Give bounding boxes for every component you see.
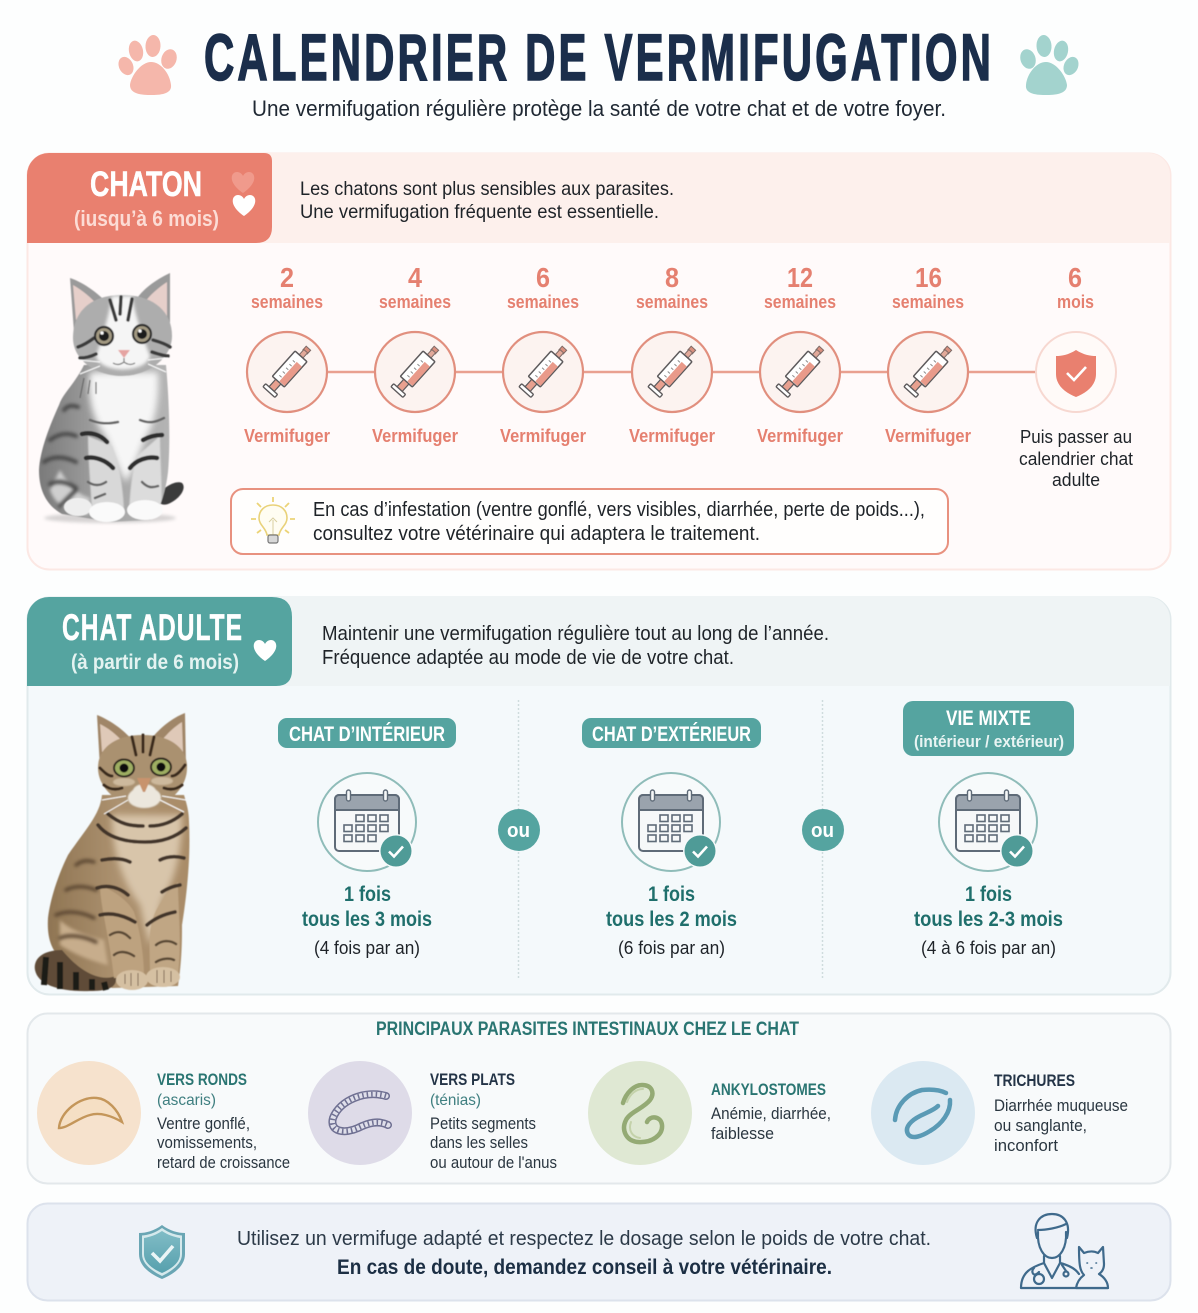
parasite: vers plats: dans les selles (430, 1134, 528, 1152)
chaton tab: CHATON (90, 165, 202, 204)
chat adulte tab (27, 597, 292, 686)
timeline step: 6 semaines: Vermifuger (500, 426, 586, 446)
callout: infestation (231, 489, 948, 554)
panel: parasites (28, 1014, 1170, 1184)
timeline step: 12 semaines: semaines (764, 292, 836, 312)
chaton tab (27, 153, 272, 243)
conseil text: Utilisez un vermifuge adapté et respectez le dosage selon le poids de votre chat. (237, 1227, 931, 1250)
timeline step: 6 semaines (500, 262, 586, 446)
chat adulte description: Maintenir une vermifugation régulière tout au long de l’année. (322, 623, 829, 645)
parasite: vers plats (308, 1061, 557, 1172)
parasite: trichures: Diarrhée muqueuse (994, 1097, 1128, 1115)
column: chat d'intérieur: tous les 3 mois (302, 908, 432, 931)
timeline step: 12 semaines (757, 262, 843, 446)
column: chat d'extérieur: CHAT D’EXTÉRIEUR (592, 723, 751, 746)
panel: chat adulte (27, 597, 1170, 994)
chaton tab: (iusqu’à 6 mois) (74, 206, 219, 231)
icon: pink paw (116, 35, 179, 95)
timeline step: 2 semaines: 2 (280, 262, 294, 293)
timeline step: 6 mois (1019, 262, 1133, 490)
"ou" badge 1 (498, 809, 540, 851)
chaton description: Les chatons sont plus sensibles aux parasites. (300, 178, 674, 200)
column: vie mixte: tous les 2-3 mois (914, 908, 1063, 931)
header (116, 20, 1081, 121)
timeline step: 6 mois: mois (1057, 292, 1094, 312)
parasite: trichures: TRICHURES (994, 1071, 1075, 1090)
column: chat d'intérieur (278, 718, 456, 958)
column: chat d'extérieur (582, 718, 761, 958)
parasite: trichures (871, 1061, 1128, 1165)
timeline step: 16 semaines: 16 (915, 262, 942, 293)
timeline step: 8 semaines: semaines (636, 292, 708, 312)
timeline step: 6 mois: adulte (1052, 470, 1100, 490)
timeline step: 2 semaines: Vermifuger (244, 426, 330, 446)
timeline step: 16 semaines (885, 262, 971, 446)
timeline step: 16 semaines: Vermifuger (885, 426, 971, 446)
column: chat d'intérieur: CHAT D’INTÉRIEUR (289, 723, 445, 746)
chat adulte tab: (à partir de 6 mois) (71, 651, 239, 674)
column: vie mixte: (4 à 6 fois par an) (921, 937, 1056, 958)
column: chat d'extérieur: 1 fois (648, 883, 695, 906)
timeline step: 4 semaines (372, 262, 458, 446)
parasite: trichures: inconfort (994, 1137, 1058, 1155)
conseil text (237, 1227, 931, 1279)
column: vie mixte: VIE MIXTE (946, 707, 1031, 730)
parasite: vers ronds: retard de croissance (157, 1154, 290, 1172)
timeline step: 12 semaines: Vermifuger (757, 426, 843, 446)
parasite: vers ronds: VERS RONDS (157, 1070, 247, 1089)
timeline step: 8 semaines (629, 262, 715, 446)
chat adulte description: Fréquence adaptée au mode de vie de votre chat. (322, 647, 734, 669)
illustration: adult tabby cat (35, 713, 189, 991)
parasite: vers ronds: vomissements, (157, 1134, 257, 1152)
conseil text: En cas de doute, demandez conseil à votre vétérinaire. (337, 1256, 832, 1279)
timeline step: 8 semaines: Vermifuger (629, 426, 715, 446)
icon: vet with cat (1021, 1214, 1108, 1288)
timeline step: 16 semaines: semaines (892, 292, 964, 312)
parasite: vers plats: (ténias) (430, 1092, 481, 1109)
chaton description: Une vermifugation fréquente est essentielle. (300, 201, 659, 223)
panel: conseil (28, 1204, 1170, 1300)
icon: teal paw (1018, 35, 1081, 95)
column: vie mixte: (intérieur / extérieur) (914, 732, 1064, 751)
parasite: ankylostomes: faiblesse (711, 1125, 774, 1143)
parasite: vers plats: Petits segments (430, 1115, 536, 1133)
timeline step: 12 semaines: 12 (787, 262, 813, 293)
timeline step: 6 semaines: semaines (507, 292, 579, 312)
parasite: vers plats: VERS PLATS (430, 1070, 515, 1089)
parasite: vers ronds: (ascaris) (157, 1092, 216, 1109)
illustration: kitten (39, 273, 184, 523)
timeline step: 4 semaines: 4 (408, 262, 422, 293)
parasite: ankylostomes (588, 1061, 831, 1165)
timeline step: 4 semaines: semaines (379, 292, 451, 312)
timeline step: 8 semaines: 8 (665, 262, 679, 293)
parasite: ankylostomes: ANKYLOSTOMES (711, 1080, 826, 1099)
chat adulte tab: CHAT ADULTE (62, 607, 243, 648)
"ou" badge 1: ou (507, 820, 530, 842)
parasites heading: PRINCIPAUX PARASITES INTESTINAUX CHEZ LE CHAT (376, 1019, 799, 1040)
timeline step: 6 mois: 6 (1068, 262, 1082, 293)
timeline step: 2 semaines: semaines (251, 292, 323, 312)
timeline step: 6 mois: calendrier chat (1019, 449, 1133, 469)
"ou" badge 2 (802, 809, 844, 851)
icon: shield (139, 1225, 185, 1279)
parasite: vers plats: ou autour de l'anus (430, 1154, 557, 1172)
"ou" badge 2: ou (811, 820, 834, 842)
chat adulte description (322, 623, 829, 669)
timeline connector lines (327, 371, 1036, 373)
column: chat d'intérieur: (4 fois par an) (314, 937, 420, 958)
icon: light bulb (251, 497, 295, 543)
parasite: vers ronds: Ventre gonflé, (157, 1115, 250, 1133)
column: chat d'extérieur: (6 fois par an) (618, 937, 725, 958)
timeline step: 4 semaines: Vermifuger (372, 426, 458, 446)
timeline step: 2 semaines (244, 262, 330, 446)
subtitle: Une vermifugation régulière protège la santé de votre chat et de votre foyer. (252, 96, 946, 121)
dashed column dividers (518, 700, 822, 978)
column: vie mixte: 1 fois (965, 883, 1012, 906)
column: chat d'extérieur: tous les 2 mois (606, 908, 737, 931)
timeline step: 6 semaines: 6 (536, 262, 550, 293)
timeline step: 6 mois: Puis passer au (1020, 427, 1132, 447)
column: vie mixte (903, 701, 1074, 958)
parasite: ankylostomes: Anémie, diarrhée, (711, 1105, 831, 1123)
callout: infestation: consultez votre vétérinaire qui adaptera le traitement. (313, 523, 760, 545)
column: chat d'intérieur: 1 fois (344, 883, 391, 906)
parasite: trichures: ou sanglante, (994, 1117, 1087, 1135)
panel: chaton (27, 153, 1170, 570)
parasite: vers ronds (37, 1061, 290, 1172)
chaton description (300, 178, 674, 223)
callout: infestation: En cas d’infestation (ventre gonflé, vers visibles, diarrhée, perte de poids...), (313, 499, 925, 521)
